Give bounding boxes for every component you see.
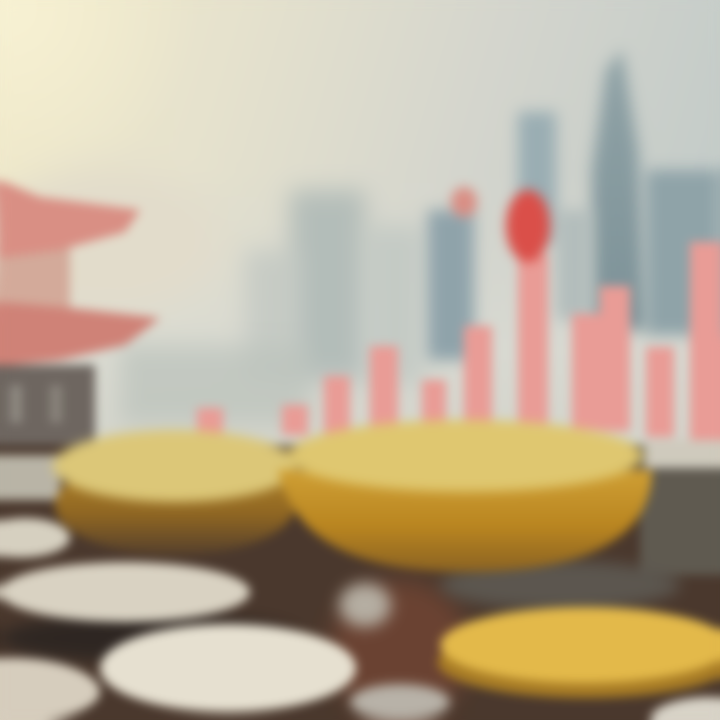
pagoda	[0, 180, 160, 450]
red flag marker	[451, 187, 550, 262]
right gold coin	[437, 607, 720, 698]
foreground base	[0, 440, 720, 720]
distant city skyline	[120, 50, 720, 425]
left gold coin	[53, 430, 297, 555]
red bar chart	[197, 242, 720, 440]
central gold coin	[278, 420, 652, 572]
white coins	[0, 518, 720, 720]
